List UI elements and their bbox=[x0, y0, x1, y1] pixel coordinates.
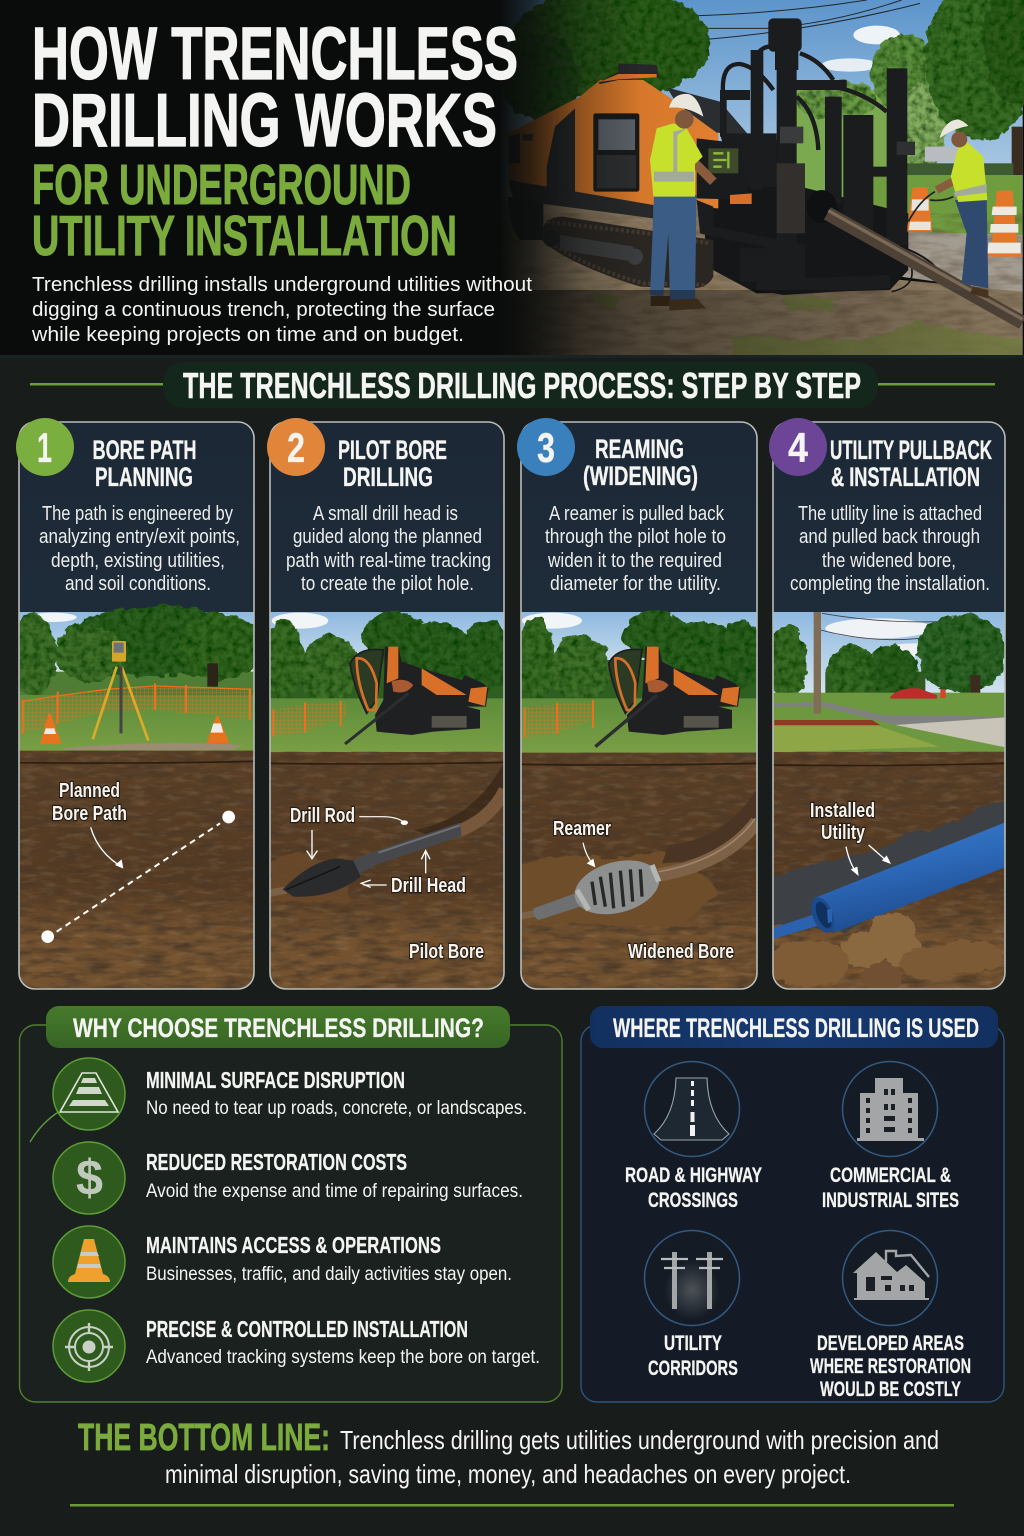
label: utility corridors bbox=[648, 1332, 738, 1380]
panel: why choose trenchless drilling bbox=[20, 1006, 562, 1402]
bottom line statement: THE BOTTOM LINE: bbox=[78, 1417, 330, 1459]
step heading: PILOT BORE bbox=[338, 435, 447, 465]
label: commercial and industrial sites: INDUSTRIAL SITES bbox=[822, 1189, 959, 1212]
label: road and highway crossings bbox=[625, 1164, 762, 1212]
panel: step 3 reaming bbox=[515, 418, 764, 993]
benefit: maintains access and operations: Businesses, traffic, and daily activities stay open. bbox=[146, 1264, 512, 1285]
card border bbox=[521, 422, 757, 989]
labels: drill rod, drill head, pilot bore: Pilot Bore bbox=[409, 941, 484, 963]
step heading bbox=[583, 434, 698, 491]
label: commercial and industrial sites: COMMERCIAL & bbox=[830, 1164, 951, 1187]
benefit: maintains access and operations bbox=[146, 1232, 512, 1285]
step heading bbox=[830, 435, 992, 492]
icon: utility poles bbox=[644, 1230, 740, 1326]
labels: reamer, widened bore bbox=[553, 818, 734, 963]
step description: to create the pilot hole. bbox=[301, 573, 474, 595]
panel heading bbox=[590, 1006, 998, 1048]
label: utility corridors: CORRIDORS bbox=[648, 1357, 738, 1380]
benefit: reduced restoration costs: REDUCED RESTORATION COSTS bbox=[146, 1149, 407, 1175]
step heading: BORE PATH bbox=[92, 435, 196, 465]
step number badge bbox=[517, 418, 575, 476]
benefit: reduced restoration costs bbox=[146, 1149, 523, 1202]
step description: A reamer is pulled back bbox=[549, 503, 725, 525]
cones bbox=[907, 187, 932, 232]
step heading bbox=[338, 435, 447, 492]
icon: commercial buildings bbox=[842, 1062, 938, 1156]
step description: the widened bore, bbox=[822, 550, 956, 572]
main title: HOW TRENCHLESS bbox=[32, 12, 518, 95]
main title bbox=[32, 12, 518, 162]
icon: road bbox=[644, 1062, 740, 1156]
step description: diameter for the utility. bbox=[550, 573, 721, 595]
drill pipe bbox=[827, 213, 1023, 323]
panel: step 4 utility pullback bbox=[767, 418, 1009, 993]
step number badge: 3 bbox=[537, 424, 555, 471]
step heading: (WIDENING) bbox=[583, 461, 698, 491]
step description bbox=[286, 503, 491, 595]
icon: dollar sign bbox=[53, 1142, 125, 1214]
step heading: REAMING bbox=[595, 434, 684, 464]
label: installed utility: Installed bbox=[810, 800, 875, 822]
subtitle bbox=[32, 153, 457, 268]
step description: and soil conditions. bbox=[65, 573, 211, 595]
card border bbox=[773, 422, 1005, 989]
labels: drill rod, drill head, pilot bore bbox=[290, 805, 484, 963]
subtitle: FOR UNDERGROUND bbox=[32, 153, 411, 217]
step heading: PLANNING bbox=[95, 462, 193, 492]
subtitle: UTILITY INSTALLATION bbox=[32, 204, 457, 268]
labels: drill rod, drill head, pilot bore: Drill Rod bbox=[290, 805, 355, 827]
panel: step 1 bore path planning bbox=[10, 418, 262, 991]
icon: dollar sign: $ bbox=[76, 1150, 103, 1206]
intro paragraph: digging a continuous trench, protecting the surface bbox=[32, 299, 495, 321]
label: developed areas: DEVELOPED AREAS bbox=[817, 1332, 964, 1355]
scene: survey tripod above planned bore path bbox=[10, 607, 262, 991]
icon: houses bbox=[842, 1230, 938, 1326]
step description bbox=[39, 503, 240, 595]
panel: where trenchless drilling is used bbox=[581, 1006, 1004, 1402]
step number badge bbox=[267, 418, 325, 476]
label: developed areas bbox=[810, 1332, 971, 1401]
benefit: minimal surface disruption: MINIMAL SURFACE DISRUPTION bbox=[146, 1067, 405, 1093]
step description: and pulled back through bbox=[799, 526, 980, 548]
intro paragraph bbox=[31, 274, 532, 346]
rig body bbox=[508, 80, 718, 208]
step heading bbox=[92, 435, 196, 492]
label: installed utility: Utility bbox=[821, 822, 866, 844]
step description: The path is engineered by bbox=[42, 503, 233, 525]
bottom line statement: minimal disruption, saving time, money, and headaches on every project. bbox=[165, 1459, 851, 1489]
scene: rig and reamer underground bbox=[515, 610, 764, 993]
intro paragraph: while keeping projects on time and on budget. bbox=[31, 324, 464, 346]
panel heading: WHY CHOOSE TRENCHLESS DRILLING? bbox=[73, 1013, 484, 1043]
label: planned bore path: Bore Path bbox=[52, 803, 127, 825]
footer rule bbox=[70, 1504, 954, 1506]
step number badge: 2 bbox=[287, 424, 305, 471]
step heading: DRILLING bbox=[343, 462, 433, 492]
dark backing behind rig bbox=[700, 140, 908, 293]
step number badge: 4 bbox=[788, 424, 809, 471]
label: developed areas: WOULD BE COSTLY bbox=[820, 1378, 961, 1401]
benefit: reduced restoration costs: Avoid the expense and time of repairing surfaces. bbox=[146, 1181, 523, 1202]
scene: rig and drill head underground bbox=[263, 612, 512, 992]
labels: reamer, widened bore: Reamer bbox=[553, 818, 611, 840]
labels: drill rod, drill head, pilot bore: Drill Head bbox=[391, 875, 466, 897]
step description: A small drill head is bbox=[313, 503, 458, 525]
main title: DRILLING WORKS bbox=[32, 78, 497, 162]
step number badge: 1 bbox=[37, 424, 52, 471]
label: planned bore path: Planned bbox=[59, 780, 120, 802]
hero bottom edge bbox=[0, 355, 1024, 358]
hero photo: drilling rig and workers bbox=[0, 0, 1024, 357]
step description bbox=[790, 503, 990, 595]
label: road and highway crossings: CROSSINGS bbox=[648, 1189, 738, 1212]
step description: The utllity line is attached bbox=[798, 503, 982, 525]
label: road and highway crossings: ROAD & HIGHWAY bbox=[625, 1164, 762, 1187]
benefit: precise and controlled installation bbox=[146, 1316, 540, 1368]
step description: guided along the planned bbox=[293, 526, 482, 548]
step description: analyzing entry/exit points, bbox=[39, 526, 240, 548]
step description: path with real-time tracking bbox=[286, 550, 491, 572]
control panel bbox=[696, 138, 722, 199]
bottom line statement bbox=[78, 1417, 939, 1489]
step description: depth, existing utilities, bbox=[51, 550, 225, 572]
benefit: minimal surface disruption: No need to tear up roads, concrete, or landscapes. bbox=[146, 1098, 527, 1119]
small rig bbox=[595, 647, 740, 747]
step description: widen it to the required bbox=[547, 550, 722, 572]
step number badge bbox=[769, 418, 827, 476]
step description: completing the installation. bbox=[790, 573, 990, 595]
step number badge bbox=[16, 418, 74, 476]
label: commercial and industrial sites bbox=[822, 1164, 959, 1212]
small rig bbox=[345, 647, 488, 744]
step description bbox=[545, 503, 726, 595]
card border bbox=[19, 422, 254, 989]
benefit: minimal surface disruption bbox=[146, 1067, 527, 1119]
scene: finished surface and blue utility pipe bbox=[767, 612, 1009, 993]
label: installed utility bbox=[810, 800, 875, 844]
card border bbox=[270, 422, 504, 989]
icon: target crosshair bbox=[53, 1310, 125, 1382]
panel heading bbox=[46, 1006, 510, 1048]
icon: road surface bbox=[30, 1058, 125, 1142]
labels: reamer, widened bore: Widened Bore bbox=[628, 941, 734, 963]
label: utility corridors: UTILITY bbox=[664, 1332, 722, 1355]
mast and frame bbox=[697, 18, 907, 295]
worker one bbox=[650, 195, 697, 302]
label: planned bore path bbox=[52, 780, 127, 825]
icon: traffic cone bbox=[53, 1226, 125, 1298]
benefit: precise and controlled installation: Advanced tracking systems keep the bore on target. bbox=[146, 1347, 540, 1368]
worker two bbox=[955, 199, 988, 288]
panel: step 2 pilot bore drilling bbox=[263, 418, 512, 992]
benefit: maintains access and operations: MAINTAINS ACCESS & OPERATIONS bbox=[146, 1232, 441, 1258]
intro paragraph: Trenchless drilling installs underground utilities without bbox=[32, 274, 532, 296]
step description: through the pilot hole to bbox=[545, 526, 726, 548]
benefit: precise and controlled installation: PRECISE & CONTROLLED INSTALLATION bbox=[146, 1316, 468, 1342]
